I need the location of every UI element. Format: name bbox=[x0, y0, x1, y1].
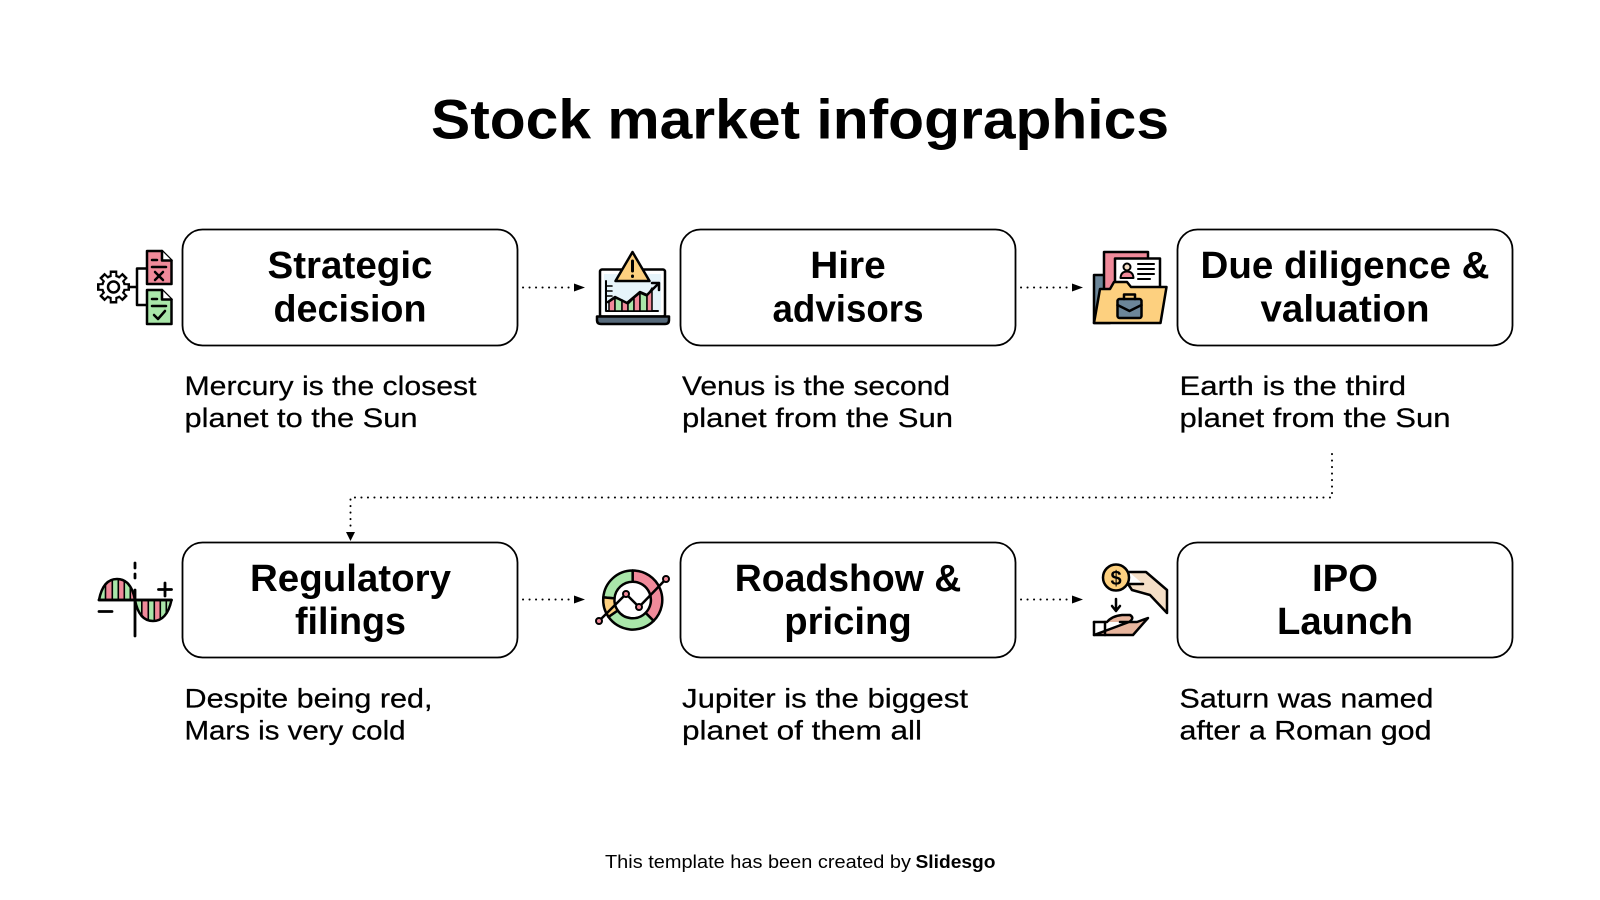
icon: laptop with warning bbox=[597, 252, 669, 324]
panel: due diligence and valuation bbox=[1094, 230, 1512, 433]
heading: IPO launch: IPO bbox=[1312, 558, 1378, 600]
icon: hands exchanging coin: $ bbox=[1110, 568, 1122, 590]
icon: hands exchanging coin bbox=[1094, 564, 1167, 635]
description: earth: Earth is the third bbox=[1180, 371, 1406, 401]
heading: roadshow and pricing: pricing bbox=[784, 601, 912, 643]
title: Stock market infographics bbox=[431, 88, 1169, 150]
heading: hire advisors: Hire bbox=[810, 245, 886, 287]
footer credit: This template has been created by bbox=[605, 851, 912, 872]
box: IPO launch bbox=[1178, 542, 1512, 658]
heading: due diligence and valuation: Due diligence & bbox=[1200, 245, 1490, 287]
heading: IPO launch: Launch bbox=[1277, 601, 1413, 643]
panel: roadshow and pricing bbox=[596, 542, 1016, 746]
description: earth: planet from the Sun bbox=[1180, 403, 1450, 433]
icon: gear with documents bbox=[97, 251, 172, 324]
description: venus: planet from the Sun bbox=[682, 403, 953, 433]
heading: regulatory filings: Regulatory bbox=[250, 558, 451, 600]
arrow: step 1 to step 2 bbox=[523, 284, 585, 292]
icon: folder with documents bbox=[1094, 252, 1166, 323]
icon: donut chart with line bbox=[596, 570, 669, 630]
heading: strategic decision: decision bbox=[274, 288, 426, 330]
description: jupiter: Jupiter is the biggest bbox=[682, 684, 969, 714]
heading: hire advisors: advisors bbox=[772, 288, 924, 330]
footer credit: Slidesgo bbox=[916, 851, 996, 872]
panel: regulatory filings bbox=[99, 542, 518, 746]
arrow: step 4 to step 5 bbox=[523, 596, 585, 604]
arrow: step 5 to step 6 bbox=[1021, 596, 1083, 604]
description: mars: Mars is very cold bbox=[184, 716, 406, 746]
heading: strategic decision: Strategic bbox=[268, 245, 432, 287]
description: venus: Venus is the second bbox=[682, 371, 950, 401]
box: roadshow and pricing bbox=[680, 542, 1016, 658]
description: mercury: planet to the Sun bbox=[184, 403, 418, 433]
box: strategic decision bbox=[182, 230, 518, 346]
panel: IPO launch bbox=[1094, 542, 1512, 746]
box: regulatory filings bbox=[182, 542, 518, 658]
panel: hire advisors bbox=[597, 230, 1016, 433]
box: hire advisors bbox=[680, 230, 1016, 346]
description: jupiter: planet of them all bbox=[682, 716, 922, 746]
arrow: step 3 down and back to step 4 bbox=[346, 454, 1332, 541]
heading: due diligence and valuation: valuation bbox=[1260, 288, 1430, 330]
description: mars: Despite being red, bbox=[184, 684, 432, 714]
arrow: step 2 to step 3 bbox=[1021, 284, 1083, 292]
heading: regulatory filings: filings bbox=[295, 601, 406, 643]
icon: sine wave bbox=[99, 563, 172, 636]
box: due diligence and valuation bbox=[1178, 230, 1512, 346]
description: saturn: after a Roman god bbox=[1180, 716, 1432, 746]
description: saturn: Saturn was named bbox=[1180, 684, 1434, 714]
panel: strategic decision bbox=[97, 230, 518, 433]
description: mercury: Mercury is the closest bbox=[184, 371, 477, 401]
heading: roadshow and pricing: Roadshow & bbox=[735, 558, 961, 600]
